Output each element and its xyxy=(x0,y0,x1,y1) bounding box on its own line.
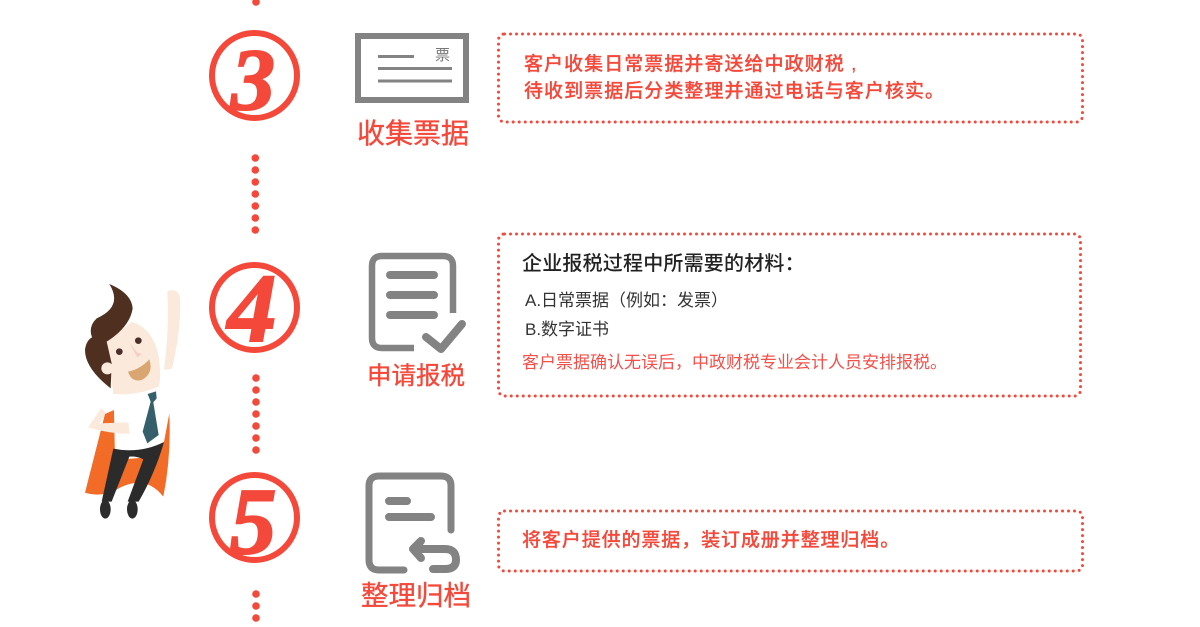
dotted box: step 5 xyxy=(498,511,1082,571)
timeline dots: step 3 to 4 xyxy=(252,154,259,234)
head xyxy=(107,322,160,394)
text block: step 3: 客户收集日常票据并寄送给中政财税 , xyxy=(524,54,857,75)
step badge 5 xyxy=(212,470,297,574)
step badge 4 xyxy=(212,255,297,363)
timeline dots: step 4 to 5 xyxy=(252,374,260,454)
ear xyxy=(101,362,113,374)
trousers xyxy=(102,442,164,502)
step badge 5: 5 xyxy=(230,470,276,574)
heading: 申请报税: 申请报税 xyxy=(367,363,465,390)
icon: document with return arrow xyxy=(369,476,456,570)
text block: step 3: 待收到票据后分类整理并通过电话与客户核实。 xyxy=(524,81,945,102)
tie xyxy=(143,391,159,443)
arm xyxy=(88,408,130,434)
step badge 3: 3 xyxy=(230,32,275,129)
materials heading: 企业报税过程中所需要的材料： xyxy=(522,253,805,275)
raised arm xyxy=(164,290,180,370)
item B: B.数字证书 xyxy=(525,320,609,339)
character: flying superhero xyxy=(85,284,180,519)
icon: document with check xyxy=(372,256,462,349)
text block: step 3 xyxy=(524,54,945,102)
icon: invoice xyxy=(358,36,466,100)
dotted box: step 3 xyxy=(498,34,1082,122)
step badge 3 xyxy=(212,32,297,129)
heading: 收集票据: 收集票据 xyxy=(357,118,469,149)
text block: step 4 materials xyxy=(522,252,947,372)
shoes xyxy=(100,500,138,519)
item A: A.日常票据（例如：发票） xyxy=(525,291,728,310)
cape xyxy=(85,410,170,497)
note: 客户票据确认无误后，中政财税专业会计人员安排报税。 xyxy=(522,353,947,372)
timeline dots: top xyxy=(252,0,260,6)
text block: step 5: 将客户提供的票据，装订成册并整理归档。 xyxy=(522,530,900,551)
timeline dots: bottom xyxy=(252,590,260,622)
hair xyxy=(85,284,133,388)
face xyxy=(116,337,151,381)
dotted box: step 4 xyxy=(498,234,1080,396)
icon: invoice: 票 xyxy=(435,47,450,64)
step badge 4: 4 xyxy=(226,255,276,363)
heading: 整理归档: 整理归档 xyxy=(361,580,471,611)
